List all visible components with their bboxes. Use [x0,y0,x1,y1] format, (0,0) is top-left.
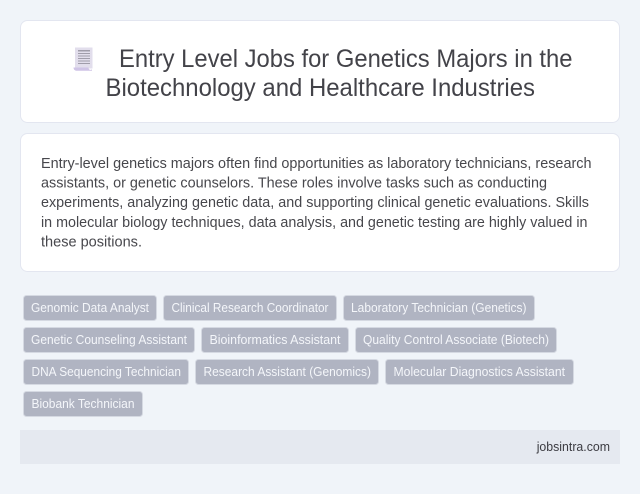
tag: Research Assistant (Genomics): Research Assistant (Genomics) [204,364,371,379]
text block: description: assistants, or genetic counselors. These roles involve tasks such as conducting [41,176,547,192]
tag: DNA Sequencing Technician: DNA Sequencing Technician [32,364,181,379]
icon: document scroll [74,48,92,71]
tag: Biobank Technician: Biobank Technician [32,396,134,411]
tag: Research Assistant (Genomics) [196,360,378,384]
tag: Molecular Diagnostics Assistant: Molecular Diagnostics Assistant [394,364,565,379]
tag: Genomic Data Analyst [24,296,156,320]
tag: Genomic Data Analyst: Genomic Data Analyst [31,300,149,315]
tag: Biobank Technician [24,392,142,416]
text block: description: Entry-level genetics majors often find opportunities as laboratory technicians, research [41,156,592,172]
tag: Quality Control Associate (Biotech) [356,328,556,352]
tag: Molecular Diagnostics Assistant [386,360,574,384]
tag: Genetic Counseling Assistant: Genetic Counseling Assistant [31,332,187,347]
text block: description: experiments, analyzing genetic data, and supporting clinical genetic evaluations. Skills [41,195,589,211]
tag: DNA Sequencing Technician [24,360,188,384]
tag: Clinical Research Coordinator [164,296,336,320]
tag: Quality Control Associate (Biotech): Quality Control Associate (Biotech) [363,332,549,347]
panel: header [20,20,620,122]
tag: Bioinformatics Assistant [202,328,348,352]
footer text: site name: jobsintra.com [536,439,610,454]
text block: description: these positions. [41,234,142,250]
panel: job tags [24,296,574,416]
title: Biotechnology and Healthcare Industries [106,74,535,102]
tag: Bioinformatics Assistant: Bioinformatics Assistant [210,332,341,347]
title [106,45,572,102]
tag: Laboratory Technician (Genetics): Laboratory Technician (Genetics) [351,300,526,315]
tag: Genetic Counseling Assistant [24,328,194,352]
text block: description [41,156,592,250]
text block: description: in molecular biology techniques, data analysis, and genetic testing are highly valued in [41,215,588,231]
panel: description [20,134,620,272]
tag: Laboratory Technician (Genetics) [344,296,534,320]
title: Entry Level Jobs for Genetics Majors in the [119,45,572,73]
tag: Clinical Research Coordinator: Clinical Research Coordinator [172,300,329,315]
footer bar [20,430,620,464]
